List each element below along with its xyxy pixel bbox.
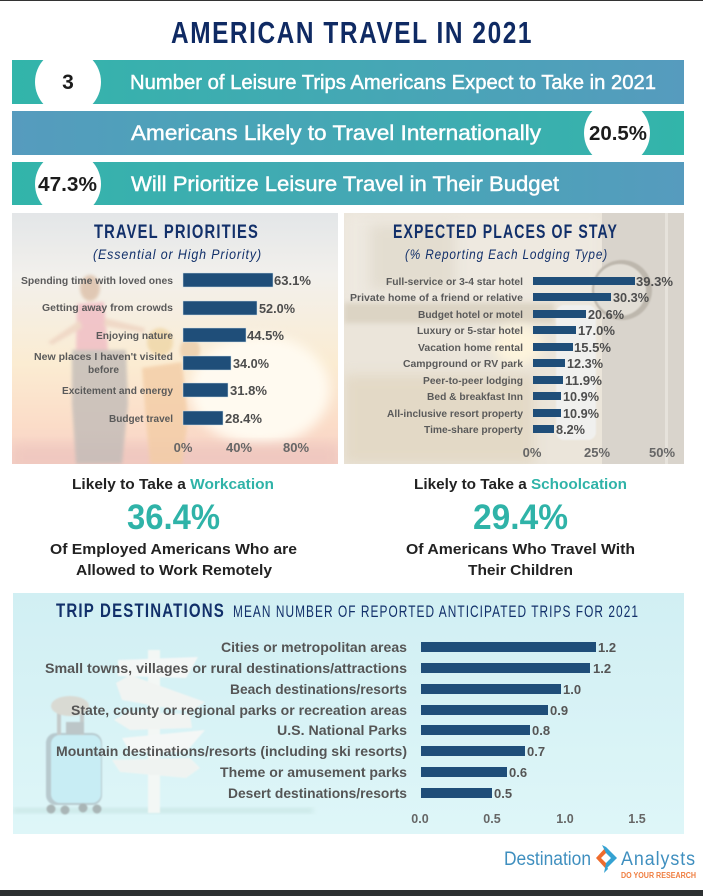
bar chart: lodging: Bed & breakfast Inn	[427, 392, 523, 403]
icon: diamond mark	[596, 845, 617, 873]
banner: budget priority: Will Prioritize Leisure Travel in Their Budget	[131, 173, 559, 196]
panel: expected places of stay	[344, 213, 684, 464]
bar chart: priorities: 28.4%	[225, 411, 262, 426]
bar chart: lodging: 10.9%	[563, 389, 599, 404]
callout: schoolcation: 29.4%	[473, 498, 568, 537]
bar chart: destinations: 0.5	[494, 786, 512, 801]
bar chart: destinations: Small towns, villages or rural destinations/attractions	[45, 661, 407, 676]
bar chart: lodging: 0%	[523, 445, 542, 460]
heading: TRAVEL PRIORITIES	[94, 222, 259, 243]
banner: international travel: Americans Likely to Travel Internationally	[131, 122, 542, 145]
bar chart: destinations: 0.7	[527, 744, 545, 759]
bar chart: destinations: Desert destinations/resorts	[228, 786, 407, 801]
bar chart: priorities: 52.0%	[259, 301, 295, 316]
banner: leisure trips	[12, 60, 684, 104]
panel: trip destinations	[13, 593, 684, 834]
bar chart: priorities: 80%	[283, 440, 309, 455]
callout: workcation: 36.4%	[127, 498, 220, 537]
callout: workcation	[50, 477, 297, 579]
bar chart: lodging: 50%	[649, 445, 675, 460]
bar chart: priorities	[21, 273, 311, 455]
bar chart: priorities: 34.0%	[233, 356, 269, 371]
bar chart: lodging: Full-service or 3-4 star hotel	[386, 277, 523, 288]
bar chart: lodging	[350, 274, 675, 460]
logo: Destination Analysts: DO YOUR RESEARCH	[621, 871, 696, 880]
bar chart: priorities: Budget travel	[109, 414, 173, 425]
bar chart: destinations: 1.0	[563, 682, 581, 697]
bar chart: lodging: Campground or RV park	[403, 359, 523, 370]
logo: Destination Analysts	[504, 845, 696, 880]
bar chart: priorities: 40%	[226, 440, 252, 455]
title: AMERICAN TRAVEL IN 2021	[171, 15, 533, 50]
bar chart: destinations: Theme or amusement parks	[220, 765, 407, 780]
bar chart: priorities: 31.8%	[230, 383, 267, 398]
bar chart: destinations: 0.8	[532, 723, 550, 738]
bar chart: priorities: Getting away from crowds	[42, 303, 173, 314]
subheading: (Essential or High Priority)	[93, 246, 262, 262]
bar chart: priorities: before	[88, 365, 119, 376]
logo: Destination Analysts: Destination	[504, 849, 591, 870]
banner: leisure trips: 3	[62, 71, 74, 94]
bar chart: lodging: 11.9%	[565, 373, 602, 388]
callout: schoolcation: Of Americans Who Travel With	[406, 542, 635, 558]
bar chart: priorities: Excitement and energy	[62, 386, 173, 397]
bar chart: lodging: Vacation home rental	[418, 343, 523, 354]
bar chart: lodging: All-inclusive resort property	[387, 409, 523, 420]
bar chart: lodging: Luxury or 5-star hotel	[417, 326, 523, 337]
panel: travel priorities	[12, 213, 338, 470]
bar chart: lodging: 10.9%	[563, 406, 599, 421]
bar chart: destinations: 0.0	[411, 812, 429, 826]
bar chart: destinations: U.S. National Parks	[277, 723, 407, 738]
bar chart: destinations	[45, 640, 646, 826]
banner: international travel	[12, 111, 684, 155]
bar chart: lodging: Private home of a friend or relative	[350, 293, 523, 304]
bar chart: destinations: Cities or metropolitan areas	[221, 640, 407, 655]
background photo: family at sunset	[12, 213, 338, 470]
background photo: suitcase and signpost	[13, 593, 684, 834]
bar chart: lodging: 15.5%	[574, 340, 611, 355]
bar chart: destinations: 1.5	[628, 812, 646, 826]
bar chart: lodging: 8.2%	[556, 422, 585, 437]
bar chart: priorities: New places I haven't visited	[34, 352, 173, 363]
bar chart: destinations: State, county or regional parks or recreation areas	[71, 703, 407, 718]
logo: Destination Analysts: Analysts	[621, 849, 696, 870]
bar chart: destinations: 1.2	[598, 640, 616, 655]
bar chart: destinations: 1.2	[593, 661, 611, 676]
callout: workcation: Of Employed Americans Who are	[50, 542, 297, 558]
heading: EXPECTED PLACES OF STAY	[393, 222, 618, 243]
bar chart: destinations: Mountain destinations/resorts (including ski resorts)	[56, 744, 407, 759]
bar chart: lodging: Time-share property	[424, 425, 523, 436]
bar chart: lodging: 17.0%	[578, 323, 615, 338]
bar chart: lodging: 12.3%	[567, 356, 603, 371]
bar chart: destinations: 0.6	[509, 765, 527, 780]
bar chart: lodging: Budget hotel or motel	[418, 310, 523, 321]
banner: budget priority: 47.3%	[38, 174, 97, 196]
bar chart: lodging: Peer-to-peer lodging	[423, 376, 523, 387]
bar chart: destinations: Beach destinations/resorts	[230, 682, 407, 697]
callout: schoolcation: Their Children	[468, 563, 573, 579]
bar chart: priorities: Spending time with loved ones	[21, 276, 173, 287]
bar chart: destinations: 0.9	[550, 703, 568, 718]
background photo: hotel room door	[344, 213, 684, 464]
callout: workcation: Allowed to Work Remotely	[76, 563, 272, 579]
subheading: (% Reporting Each Lodging Type)	[405, 246, 608, 262]
banner: leisure trips: Number of Leisure Trips Americans Expect to Take in 2021	[130, 72, 656, 94]
bar chart: lodging: 20.6%	[588, 307, 624, 322]
banner: international travel: 20.5%	[589, 123, 647, 145]
heading: TRIP DESTINATIONS	[56, 601, 225, 622]
bar chart: lodging: 39.3%	[636, 274, 673, 289]
bar chart: priorities: Enjoying nature	[96, 331, 173, 342]
bar chart: destinations: 0.5	[483, 812, 501, 826]
bar chart: lodging: 25%	[584, 445, 610, 460]
bar chart: lodging: 30.3%	[613, 290, 649, 305]
banner: budget priority	[12, 162, 684, 205]
callout: schoolcation	[406, 477, 635, 579]
callout: schoolcation: Likely to Take a Schoolcation	[414, 477, 627, 493]
callout: workcation: Likely to Take a Workcation	[72, 477, 274, 493]
bar chart: priorities: 44.5%	[247, 328, 284, 343]
bar chart: priorities: 63.1%	[274, 273, 311, 288]
bar chart: priorities: 0%	[174, 440, 193, 455]
bar chart: destinations: 1.0	[556, 812, 574, 826]
